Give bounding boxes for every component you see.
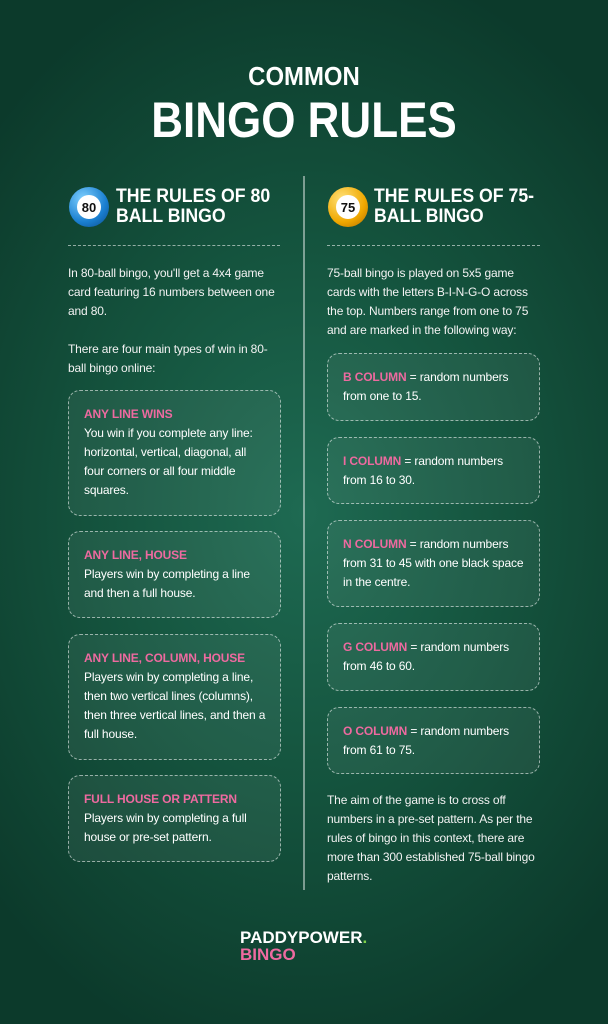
logo: BINGO xyxy=(240,945,296,964)
logo xyxy=(240,928,367,964)
divider line xyxy=(303,176,305,890)
box: any line wins: ANY LINE WINS xyxy=(84,407,173,421)
icon: 75 ball xyxy=(328,187,368,227)
box: N: N COLUMN = random numbers from 31 to 45 with one black space in the centre. xyxy=(343,537,523,589)
box: any line house: ANY LINE, HOUSE xyxy=(84,548,187,562)
box: full house: Players win by completing a full house or pre-set pattern. xyxy=(84,811,247,844)
logo: PADDYPOWER. xyxy=(240,928,367,947)
box: full house xyxy=(68,775,281,862)
heading: 75 ball: THE RULES OF 75- xyxy=(374,186,534,207)
box: any line column house xyxy=(68,634,281,760)
heading: 75 ball: BALL BINGO xyxy=(374,206,484,227)
heading: 80 ball: BALL BINGO xyxy=(116,206,226,227)
box: I xyxy=(327,437,540,504)
box: B xyxy=(327,353,540,421)
box: B: B COLUMN = random numbers from one to 15. xyxy=(343,370,508,403)
box: G: G COLUMN = random numbers from 46 to 60. xyxy=(343,640,509,673)
text: 75 intro: 75-ball bingo is played on 5x5 game cards with the letters B-I-N-G-O across the top. Numbers range from one to 75 and are marked in the following way: xyxy=(327,266,528,337)
text: 80 intro xyxy=(68,266,275,375)
box: any line house xyxy=(68,531,281,618)
box: any line wins xyxy=(68,390,281,516)
text: 75 outro: The aim of the game is to cross off numbers in a pre-set pattern. As per the rules of bingo in this context, there are more than 300 established 75-ball bingo patterns. xyxy=(327,793,535,883)
box: any line wins: You win if you complete any line: horizontal, vertical, diagonal, all four corners or all four middle squares. xyxy=(84,426,253,497)
heading: 80 ball xyxy=(116,186,270,227)
box: O xyxy=(327,707,540,774)
box: G xyxy=(327,623,540,691)
heading: 80 ball: THE RULES OF 80 xyxy=(116,186,270,207)
title xyxy=(151,61,457,148)
box: O: O COLUMN = random numbers from 61 to 75. xyxy=(343,724,509,757)
heading: 75 ball xyxy=(374,186,534,227)
box: N xyxy=(327,520,540,607)
title: BINGO RULES xyxy=(151,92,457,148)
box: I: I COLUMN = random numbers from 16 to 30. xyxy=(343,454,503,487)
icon: 75 ball: 75 xyxy=(341,200,355,214)
icon: 80 ball: 80 xyxy=(82,200,96,214)
title: COMMON xyxy=(248,61,360,91)
box: full house: FULL HOUSE OR PATTERN xyxy=(84,792,237,806)
box: any line column house: Players win by completing a line, then two vertical lines (columns), then three vertical lines, and then a full house. xyxy=(84,670,265,741)
box: any line column house: ANY LINE, COLUMN, HOUSE xyxy=(84,651,245,665)
box: any line house: Players win by completing a line and then a full house. xyxy=(84,567,250,600)
icon: 80 ball xyxy=(69,187,109,227)
text: 80 intro: In 80-ball bingo, you'll get a 4x4 game card featuring 16 numbers between one and 80. xyxy=(68,266,275,318)
text: 80 intro: There are four main types of win in 80-ball bingo online: xyxy=(68,342,268,375)
